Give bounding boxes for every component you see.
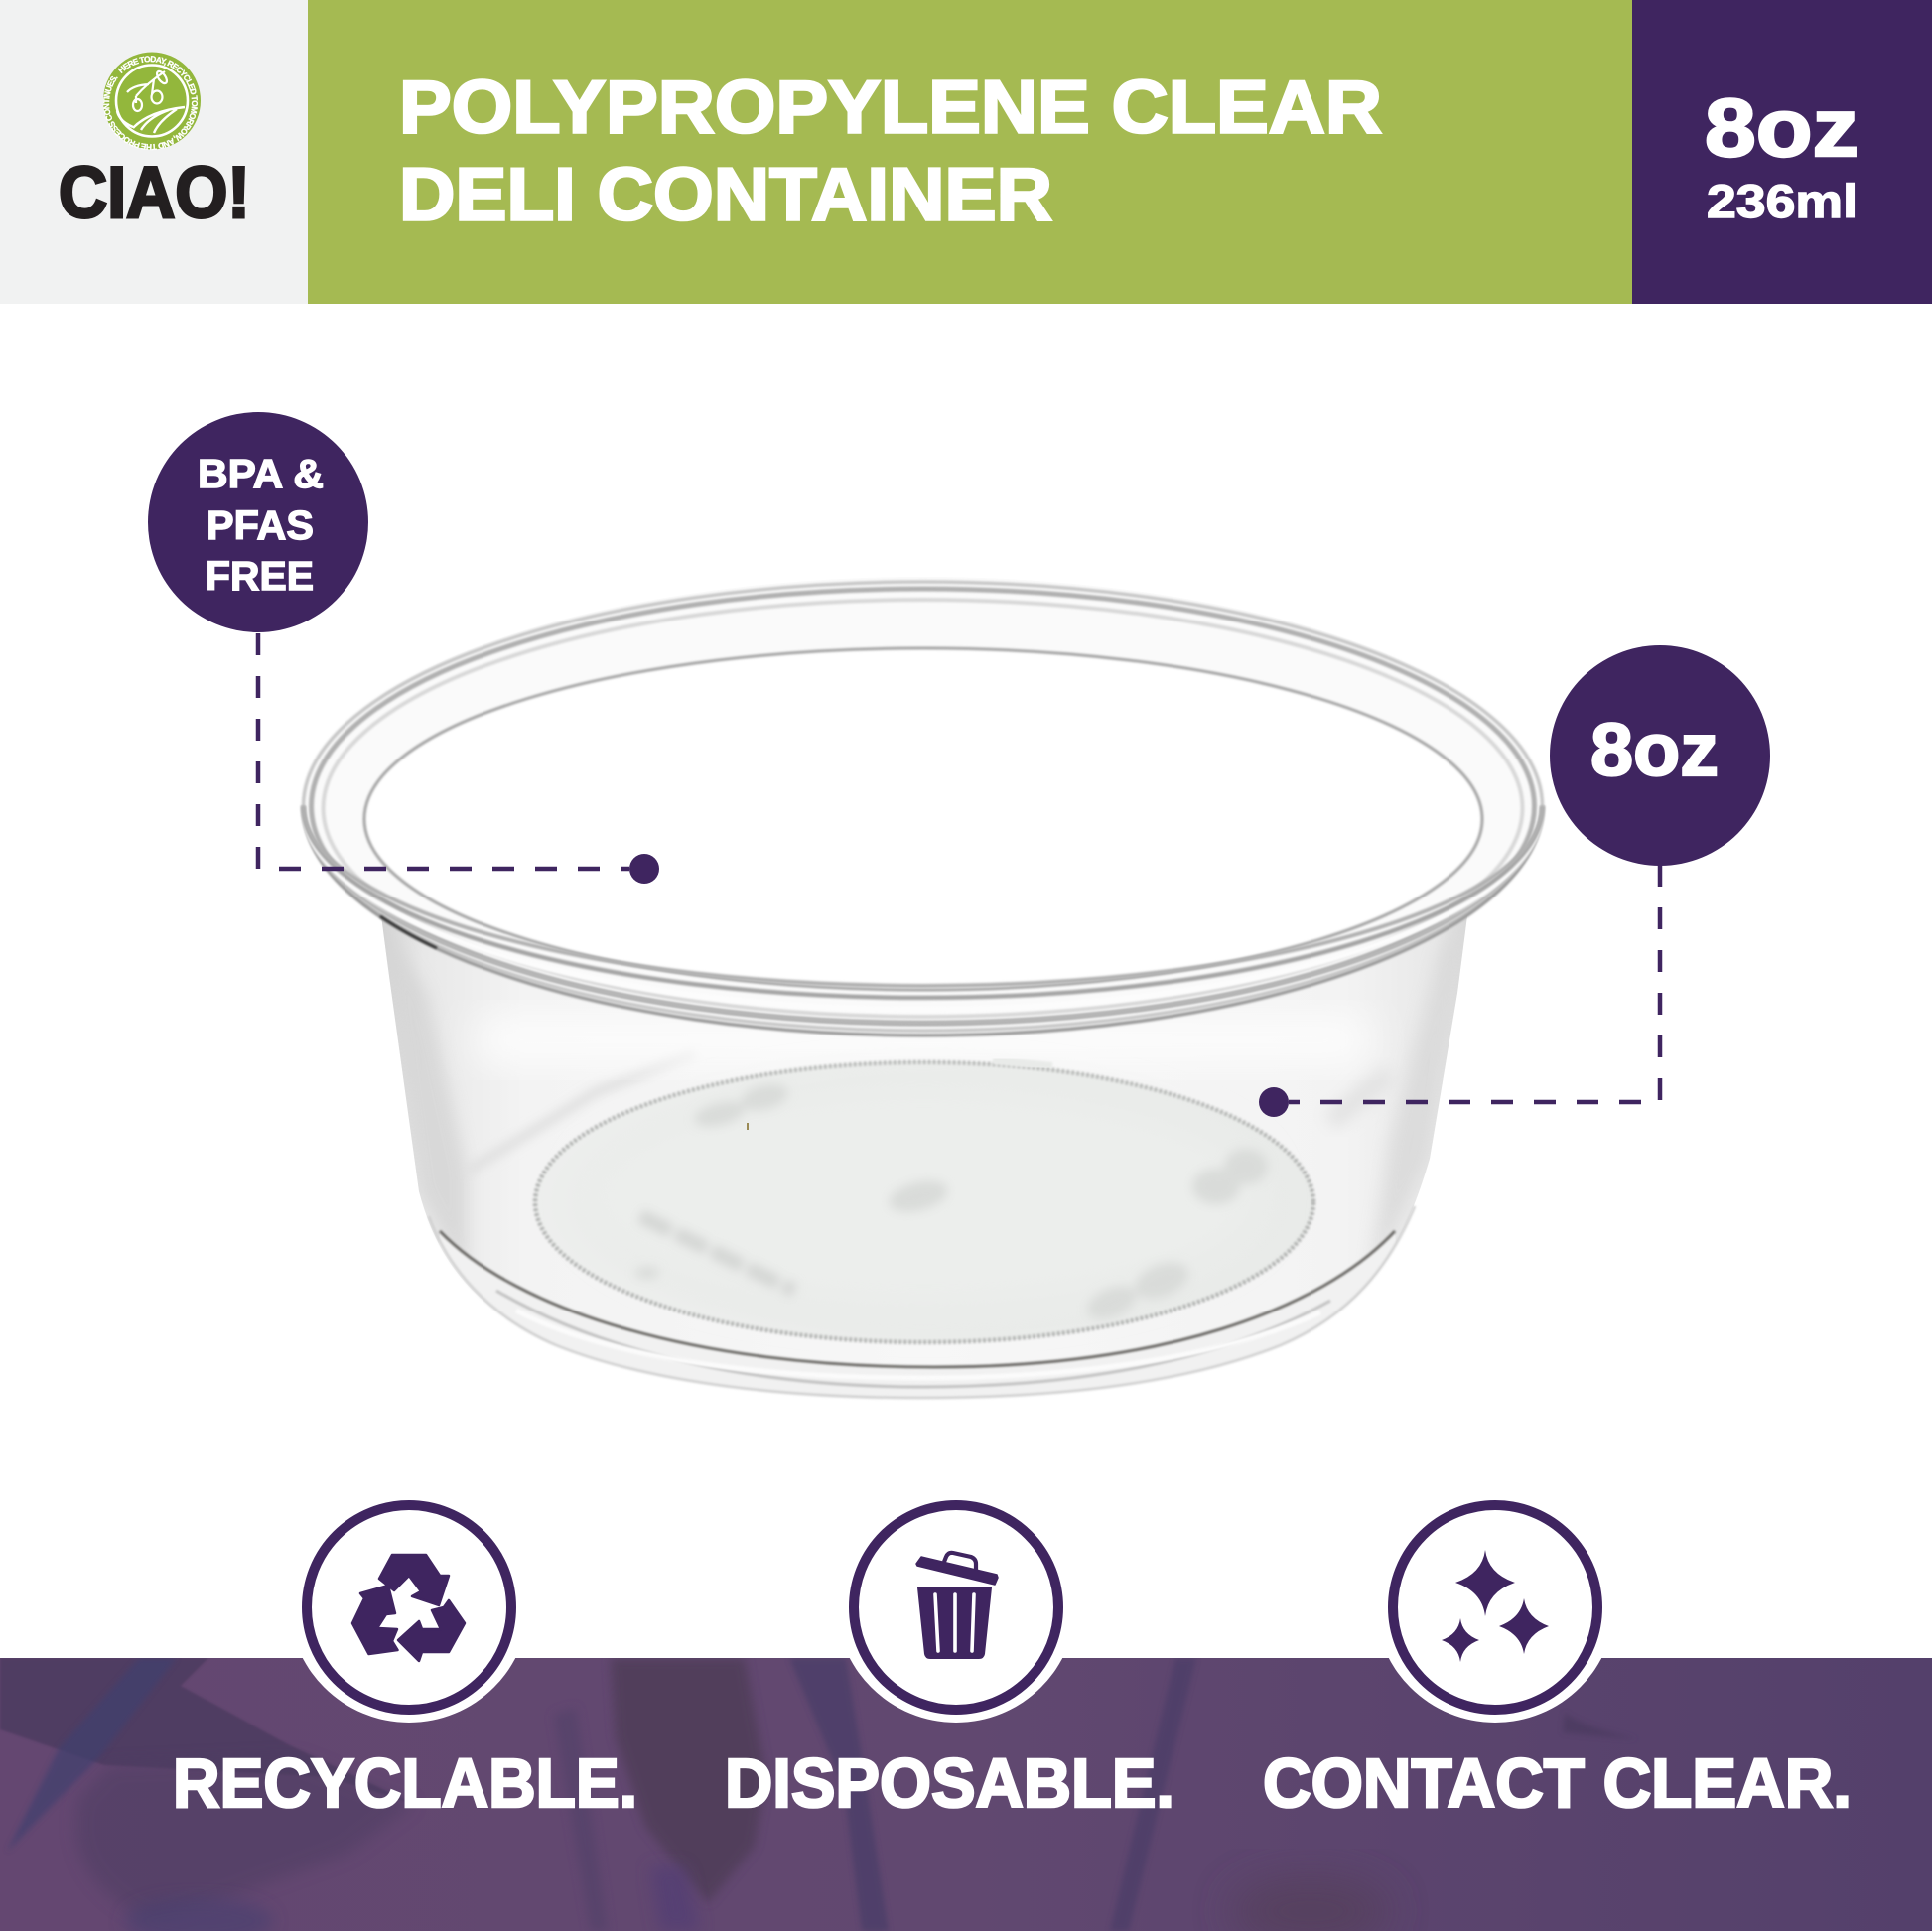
icon: Ciao badge: HERE TODAY, RECYCLED TOMORROW, AND THE PROCESS CONTINUES.: [103, 56, 199, 150]
icon: sparkles: [1375, 1482, 1615, 1723]
label: recyclable: RECYCLABLE.: [173, 1744, 637, 1822]
leader line: [1289, 865, 1660, 1102]
badge text: BPA &: [198, 451, 324, 496]
label: disposable: DISPOSABLE.: [725, 1744, 1174, 1822]
size ounces: 8oz: [1705, 81, 1859, 174]
header: size panel: [1632, 0, 1932, 304]
badge circle: [148, 412, 368, 632]
title: [399, 66, 1382, 236]
container bottom ring: [440, 1231, 1395, 1367]
icon: trash can: [836, 1482, 1076, 1723]
product photo: clear deli container: [304, 577, 1543, 1430]
logo wordmark: CIAO!: [59, 153, 250, 233]
container rim: [304, 577, 1543, 1035]
leader line: [258, 633, 629, 869]
title: DELI CONTAINER: [399, 153, 1052, 236]
container body: [381, 917, 1467, 1396]
container base disk: [534, 1060, 1314, 1343]
badge text: 8oz: [1590, 708, 1719, 791]
feature labels: [173, 1744, 1852, 1822]
badge circle: [1550, 645, 1770, 866]
header: logo panel: [0, 0, 308, 304]
badge text: PFAS: [207, 502, 314, 548]
size millilitres: 236ml: [1707, 175, 1858, 227]
bottom band: botanical purple background: [0, 1658, 1932, 1932]
callout: 8oz: [1259, 645, 1770, 1117]
leader dot: [1259, 1087, 1289, 1117]
title: POLYPROPYLENE CLEAR: [399, 66, 1382, 149]
badge text: [198, 451, 324, 599]
label: contact clear: CONTACT CLEAR.: [1263, 1744, 1852, 1822]
callout: BPA and PFAS free: [148, 412, 659, 884]
container outer edge: [429, 1206, 1415, 1398]
header: title panel: [308, 0, 1632, 304]
icon: recycling: [289, 1482, 529, 1723]
badge text: FREE: [206, 553, 314, 599]
leader dot: [629, 854, 659, 884]
